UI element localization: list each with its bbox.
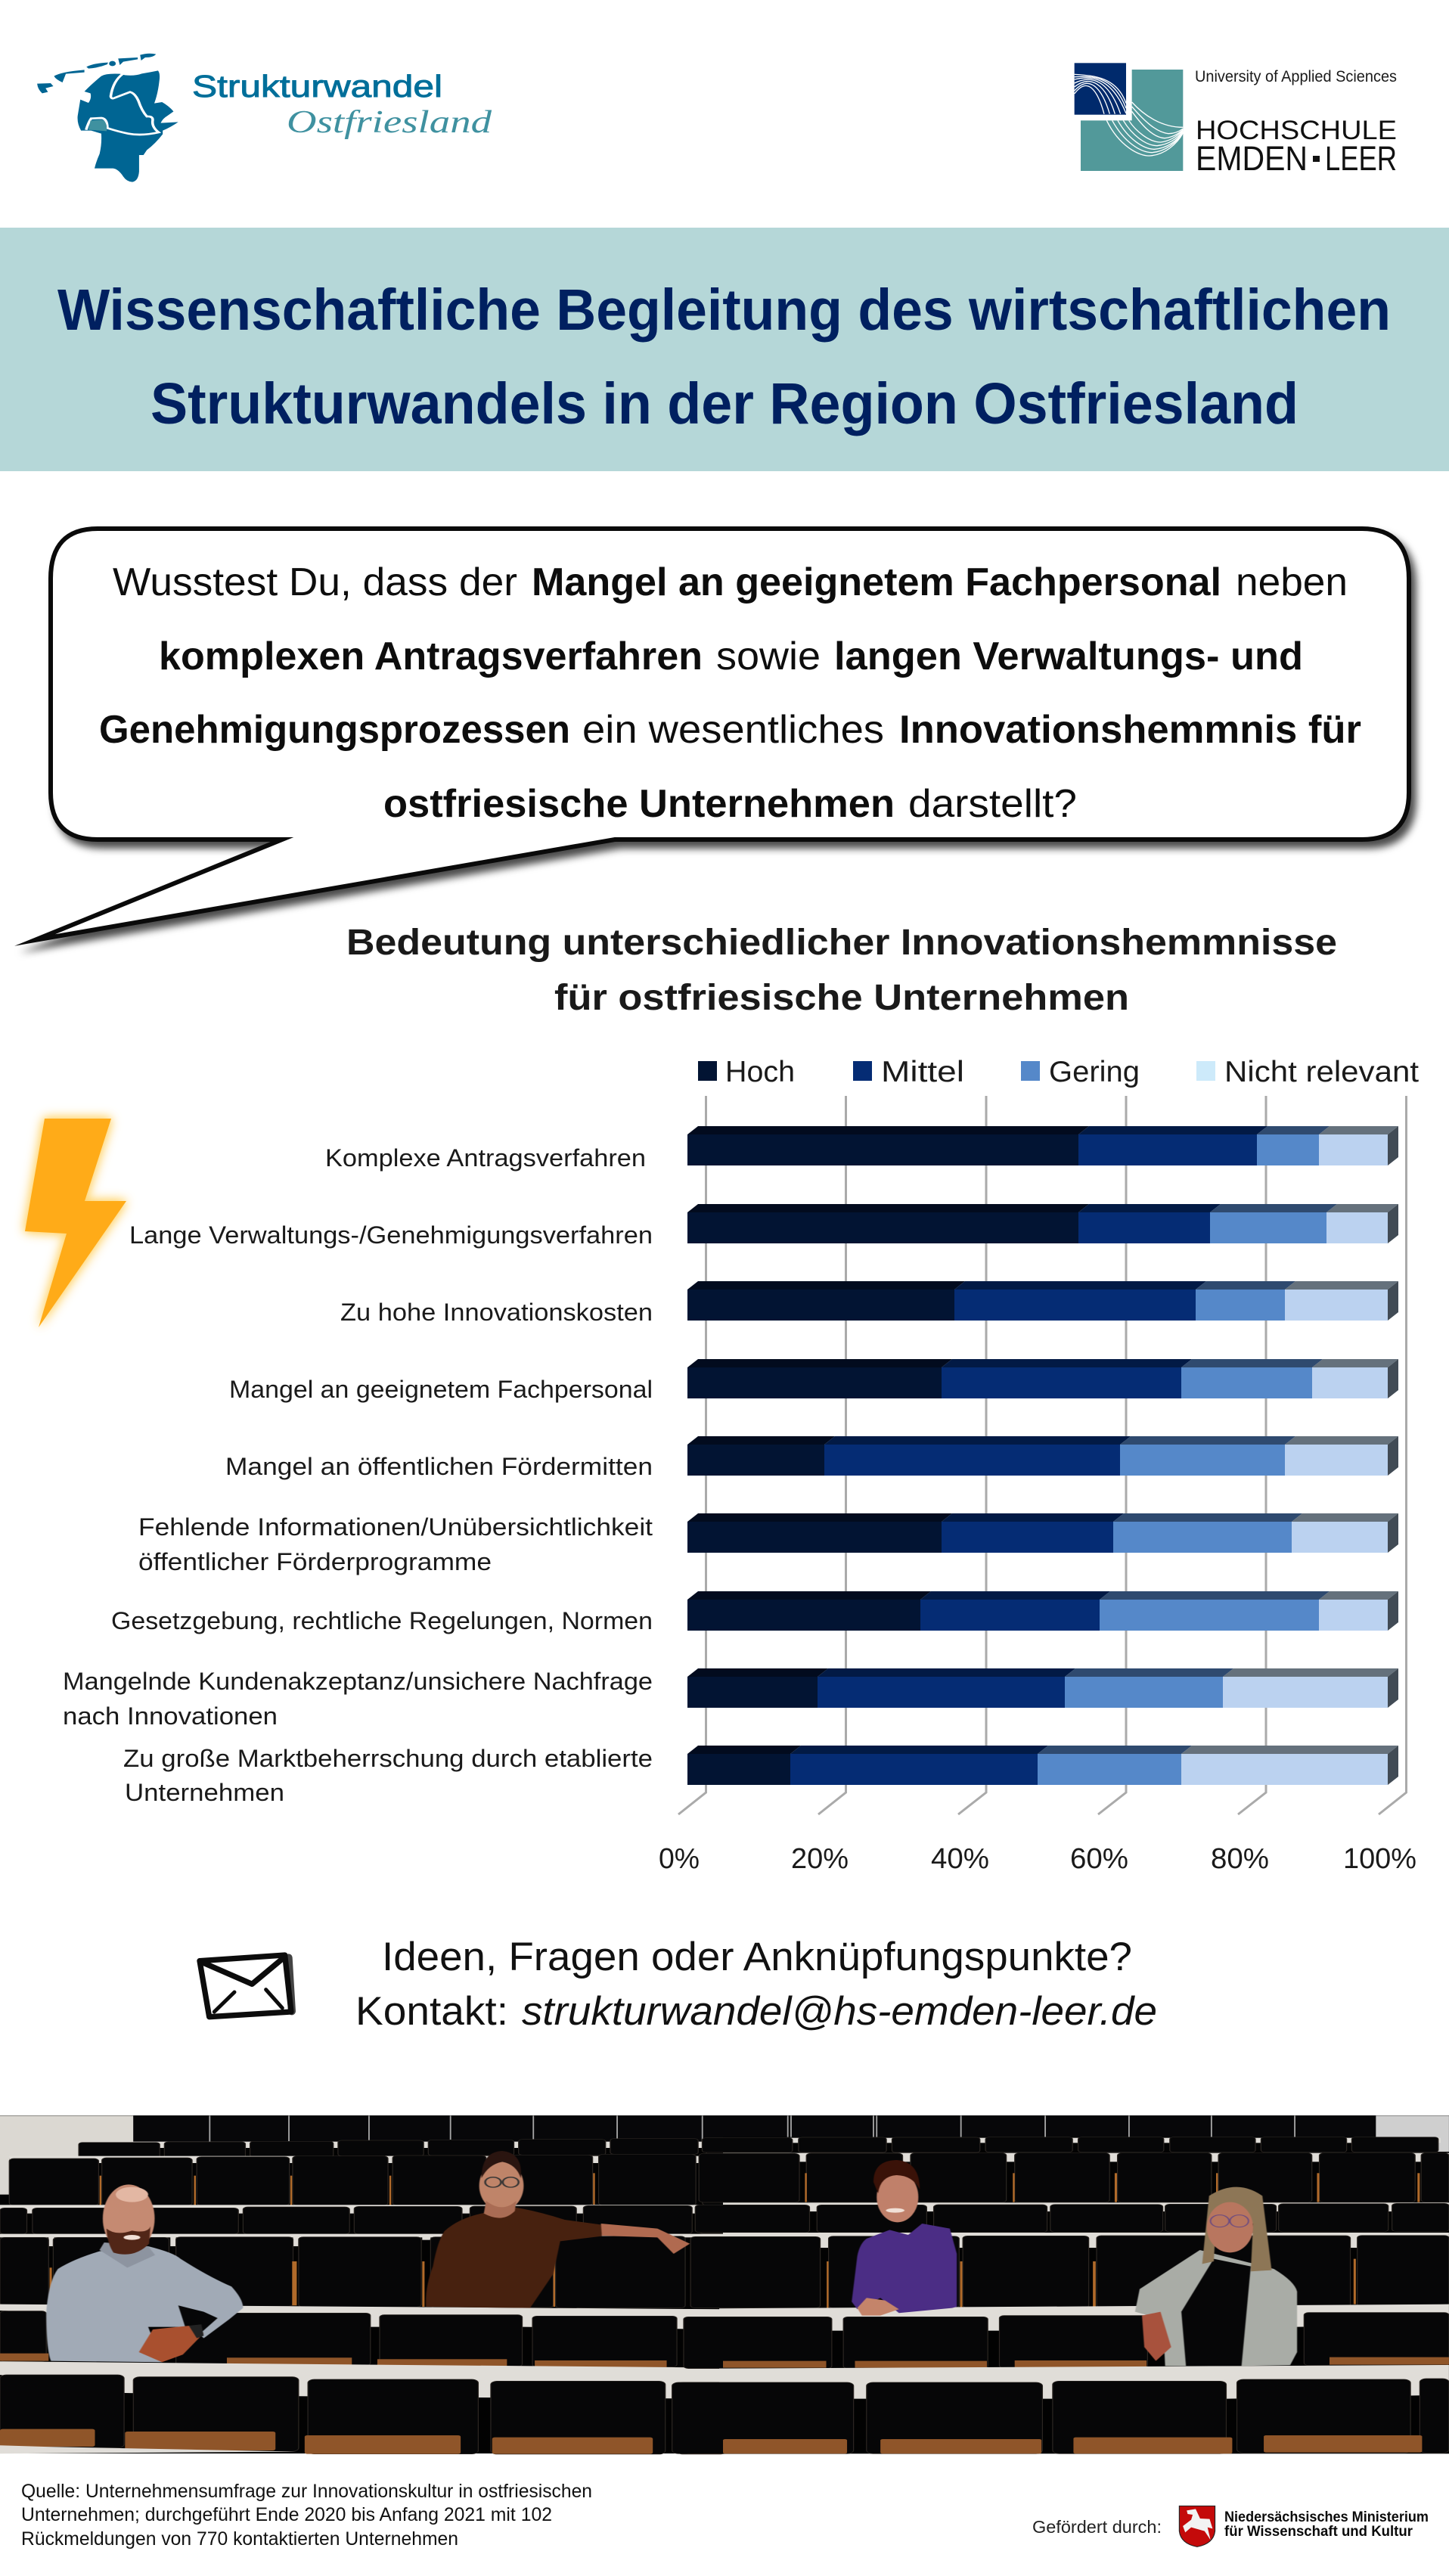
source note: Rückmeldungen von 770 kontaktierten Unternehmen xyxy=(21,2528,458,2550)
category labels: Komplexe Antragsverfahren xyxy=(325,1144,646,1172)
Hochschule line: HOCHSCHULE xyxy=(1196,116,1397,145)
contact text: strukturwandel@hs-emden-leer.de xyxy=(522,1989,1157,2034)
x axis labels: 80% xyxy=(1211,1843,1269,1875)
speech bubble callout xyxy=(35,529,1409,940)
right half of hall with two people xyxy=(672,2115,1449,2453)
title line 1: Wissenschaftliche Begleitung des wirtschaftlichen xyxy=(57,278,1391,343)
Emden Leer line: EMDEN xyxy=(1196,139,1308,178)
category labels: Mangelnde Kundenakzeptanz/unsichere Nachfrage xyxy=(63,1668,653,1695)
contact text: Kontakt: xyxy=(355,1989,508,2034)
legend: Gering xyxy=(1049,1056,1140,1088)
bar: Lange Verwaltungs-/Genehmigungsverfahren xyxy=(687,1204,1398,1243)
category labels: Lange Verwaltungs-/Genehmigungsverfahren xyxy=(129,1221,653,1249)
icon: Lower Saxony coat of arms xyxy=(1179,2506,1215,2547)
logo wordmark: Strukturwandel xyxy=(192,69,442,104)
team photo in lecture hall xyxy=(0,2115,1449,2454)
bubble text line 2: sowie xyxy=(716,635,821,678)
x axis labels xyxy=(659,1843,1416,1875)
category labels: öffentlicher Förderprogramme xyxy=(138,1548,492,1575)
bubble text line 1: Wusstest Du, dass der xyxy=(113,560,517,604)
category labels: Zu hohe Innovationskosten xyxy=(340,1299,653,1326)
icon: map of Ostfriesland xyxy=(37,54,178,182)
bubble text line 1: neben xyxy=(1236,560,1348,604)
bubble text line 4: ostfriesische Unternehmen xyxy=(383,782,895,826)
person: man in brown sweater xyxy=(426,2151,690,2308)
person: woman in grey cardigan xyxy=(1135,2187,1297,2366)
icon: envelope xyxy=(200,1955,292,2017)
category labels: Fehlende Informationen/Unübersichtlichkeit xyxy=(138,1513,653,1541)
category labels: Zu große Marktbeherrschung durch etablierte xyxy=(123,1745,653,1772)
category labels xyxy=(63,1144,653,1806)
x axis labels: 100% xyxy=(1343,1843,1416,1875)
x axis labels: 40% xyxy=(931,1843,989,1875)
person: man in grey shirt xyxy=(46,2184,243,2362)
stacked bar chart xyxy=(63,1056,1419,1875)
contact text xyxy=(355,1935,1157,2034)
title banner xyxy=(0,228,1449,471)
bar: Zu hohe Innovationskosten xyxy=(687,1281,1398,1321)
left half of hall with two people xyxy=(0,2115,726,2454)
bubble text line 2 xyxy=(159,635,1303,678)
bubble text line 3 xyxy=(99,708,1361,752)
logo: Strukturwandel Ostfriesland xyxy=(37,54,492,182)
category labels: Mangel an geeignetem Fachpersonal xyxy=(229,1376,653,1403)
bar: Mangel an geeignetem Fachpersonal xyxy=(687,1359,1398,1398)
bubble text line 3: Genehmigungsprozessen xyxy=(99,708,570,752)
bar: Mangel an öffentlichen Fördermitten xyxy=(687,1436,1398,1476)
person: woman in purple sweater xyxy=(852,2160,957,2316)
legend: Nicht relevant xyxy=(1224,1056,1419,1088)
bubble text line 2: langen Verwaltungs- und xyxy=(834,635,1303,678)
contact text: Ideen, Fragen oder Anknüpfungspunkte? xyxy=(382,1935,1132,1979)
x axis labels: 20% xyxy=(791,1843,849,1875)
bar: Mangelnde Kundenakzeptanz xyxy=(687,1668,1398,1708)
bar: Gesetzgebung xyxy=(687,1591,1398,1631)
legend xyxy=(698,1056,1419,1088)
bar: Fehlende Informationen xyxy=(687,1513,1398,1553)
bubble text line 2: komplexen Antragsverfahren xyxy=(159,635,703,678)
logo script line: Ostfriesland xyxy=(287,105,492,140)
Emden Leer line: LEER xyxy=(1325,139,1397,178)
icon: lightning bolt xyxy=(25,1119,126,1327)
category labels: Unternehmen xyxy=(125,1779,284,1806)
chart heading xyxy=(346,923,1337,1018)
legend: Mittel xyxy=(881,1056,964,1088)
chart heading: für ostfriesische Unternehmen xyxy=(554,978,1129,1018)
x axis labels: 0% xyxy=(659,1843,700,1875)
university line: University of Applied Sciences xyxy=(1195,68,1397,85)
category labels: Gesetzgebung, rechtliche Regelungen, Normen xyxy=(111,1607,653,1634)
logo: Hochschule Emden-Leer xyxy=(1075,63,1397,178)
Emden Leer line xyxy=(1196,139,1397,178)
title line 2: Strukturwandels in der Region Ostfriesland xyxy=(150,371,1299,436)
legend: Hoch xyxy=(725,1056,795,1088)
icon: university square mark xyxy=(1075,63,1183,171)
chart heading: Bedeutung unterschiedlicher Innovationshemmnisse xyxy=(346,923,1337,963)
bar: Zu große Marktbeherrschung xyxy=(687,1746,1398,1785)
source note xyxy=(21,2481,592,2550)
category labels: nach Innovationen xyxy=(63,1702,278,1730)
bubble text line 3: Innovationshemmnis für xyxy=(899,708,1361,752)
bubble text line 4: darstellt? xyxy=(908,782,1077,826)
bubble text line 3: ein wesentliches xyxy=(582,708,884,752)
funding note: Gefördert durch: xyxy=(1032,2517,1162,2537)
bubble text line 1 xyxy=(113,560,1348,604)
bar: Komplexe Antragsverfahren xyxy=(687,1126,1398,1165)
funding note: für Wissenschaft und Kultur xyxy=(1224,2524,1413,2540)
funding note xyxy=(1032,2506,1429,2547)
bubble text line 1: Mangel an geeignetem Fachpersonal xyxy=(532,560,1221,604)
category labels: Mangel an öffentlichen Fördermitten xyxy=(225,1453,653,1480)
ministry name: Niedersächsisches Ministerium xyxy=(1224,2509,1429,2525)
source note: Quelle: Unternehmensumfrage zur Innovationskultur in ostfriesischen xyxy=(21,2481,592,2502)
x axis labels: 60% xyxy=(1070,1843,1128,1875)
source note: Unternehmen; durchgeführt Ende 2020 bis Anfang 2021 mit 102 xyxy=(21,2504,552,2525)
